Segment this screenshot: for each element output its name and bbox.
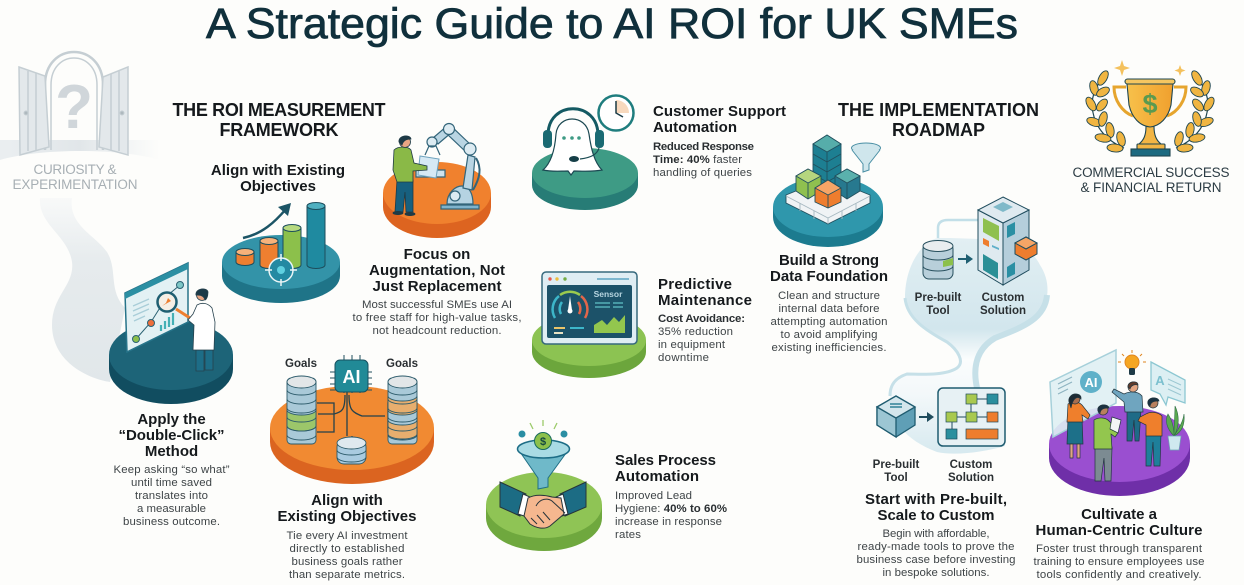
- description: training to ensure employees use: [1034, 556, 1204, 568]
- panel: build a strong data foundation: [770, 135, 888, 354]
- heading: [118, 411, 224, 460]
- icon: laurel wreath right: [1173, 69, 1216, 153]
- description: Foster trust through transparent: [1036, 543, 1203, 555]
- icon: chat bubble: A: [1155, 373, 1165, 388]
- icon: robot arm: [416, 124, 480, 209]
- description: [1034, 543, 1204, 581]
- description: until time saved: [131, 477, 212, 489]
- heading: [278, 492, 416, 525]
- icon: laurel wreath left: [1084, 69, 1127, 153]
- icon: AI screen: [1050, 350, 1116, 437]
- description: Cost Avoidance:: [658, 313, 745, 325]
- light blue roadmap path: [890, 220, 1048, 454]
- heading: [369, 246, 505, 295]
- icon: sensor dashboard: [542, 272, 637, 344]
- icon: handshake: [500, 482, 586, 528]
- goals stack: right: [388, 376, 417, 444]
- description: Clean and structure: [778, 290, 880, 302]
- icon: custom solution tower: [978, 197, 1037, 285]
- labels: Custom: [982, 292, 1024, 304]
- person: woman: [1067, 394, 1090, 458]
- icon: custom workflow panel: [938, 388, 1005, 446]
- description: not headcount reduction.: [372, 325, 502, 337]
- description: business goals rather: [292, 556, 403, 568]
- people: team: [1067, 382, 1162, 481]
- heading: Customer Support: [653, 103, 786, 120]
- icon: support chat bubble with headset: [543, 109, 604, 175]
- platform disc: [109, 320, 233, 404]
- title: A Strategic Guide to AI ROI for UK SMEs: [206, 0, 1018, 48]
- description: Begin with affordable,: [882, 528, 990, 540]
- heading: Data Foundation: [770, 268, 888, 285]
- labels: goals: Goals: [386, 358, 418, 370]
- icon: AI chip: [330, 355, 372, 393]
- labels: Pre-built: [873, 459, 919, 471]
- description: Hygiene: 40% to 60%: [615, 503, 727, 515]
- arrow: [919, 412, 934, 422]
- end point: commercial success and financial return: [1072, 60, 1230, 195]
- panel: sales process automation: [486, 420, 727, 551]
- label: curiosity and experimentation: CURIOSITY &: [34, 162, 116, 177]
- heading: Start with Pre-built,: [865, 491, 1007, 508]
- description: increase in response: [615, 516, 722, 528]
- description: downtime: [658, 352, 709, 364]
- icon: open door with question mark: ?: [55, 73, 93, 142]
- platform disc: [1049, 406, 1190, 496]
- panel: start with pre-built, scale to custom: [856, 197, 1037, 579]
- label: commercial success and financial return: [1072, 165, 1230, 195]
- floor under door: [0, 140, 160, 160]
- description: in equipment: [658, 339, 726, 351]
- description: [658, 313, 745, 364]
- icon: funnel: [852, 143, 880, 172]
- heading: [211, 162, 345, 195]
- icon: chat bubble: [1151, 362, 1185, 405]
- heading: Method: [145, 443, 198, 460]
- heading: Align with: [311, 492, 383, 509]
- description: attempting automation: [770, 316, 888, 328]
- labels: goals: Goals: [285, 358, 317, 370]
- grey winding path: [40, 198, 125, 382]
- description: handling of queries: [653, 167, 752, 179]
- heading: Sales Process: [615, 452, 716, 469]
- icon: target: [265, 254, 297, 286]
- description: Time: 40% faster: [653, 154, 742, 166]
- heading: Align with Existing: [211, 162, 345, 179]
- platform disc: [773, 177, 883, 247]
- icon: analyst in lab coat: [188, 289, 215, 371]
- description: in bespoke solutions.: [882, 567, 990, 579]
- description: to avoid amplifying: [780, 329, 878, 341]
- person: man in green: [1094, 405, 1121, 481]
- label: curiosity and experimentation: [12, 162, 138, 192]
- description: a measurable: [137, 503, 206, 515]
- description: [856, 528, 1016, 579]
- heading: Focus on: [404, 246, 470, 263]
- icon: clock: [598, 96, 634, 130]
- description: 35% reduction: [658, 326, 733, 338]
- panel: align with existing objectives (goals): [270, 355, 434, 581]
- heading: Objectives: [240, 178, 316, 195]
- description: to free staff for high-value tasks,: [352, 312, 522, 324]
- panel: focus on augmentation: [352, 124, 522, 337]
- heading: [1036, 506, 1202, 539]
- platform disc: [532, 314, 646, 378]
- heading: [770, 252, 888, 285]
- panel: cultivate a human-centric culture: [1034, 350, 1204, 581]
- label: curiosity and experimentation: EXPERIMENTATION: [12, 177, 138, 192]
- label: commercial success and financial return: COMMERCIAL SUCCESS: [1072, 165, 1230, 180]
- platform disc: [222, 235, 340, 303]
- labels: [873, 459, 994, 484]
- icon: data blocks: [786, 135, 870, 224]
- icon: funnel with coin: [518, 420, 570, 489]
- panel: customer support automation: [532, 96, 786, 210]
- person: presenter: [1112, 382, 1143, 441]
- description: existing inefficiencies.: [772, 342, 886, 354]
- icon: cube pre-built tool: [877, 396, 915, 437]
- description: business case before investing: [856, 554, 1016, 566]
- icon: AI chip: AI: [342, 367, 360, 387]
- small data stack: [337, 437, 366, 464]
- icon: stars: [1114, 60, 1186, 76]
- icon: worker: [393, 136, 427, 216]
- arrow: growth: [243, 209, 286, 238]
- heading: the implementation roadmap: ROADMAP: [892, 120, 985, 140]
- heading: Automation: [653, 119, 737, 136]
- description: than separate metrics.: [289, 569, 405, 581]
- panel: predictive maintenance: [532, 272, 752, 378]
- icon: open door with question mark: [19, 52, 128, 155]
- icon: sensor dashboard: Sensor: [594, 289, 623, 299]
- description: rates: [615, 529, 641, 541]
- description: [653, 141, 754, 179]
- description: Keep asking “so what”: [114, 464, 230, 476]
- icon: trophy: $: [1142, 89, 1158, 119]
- description: [352, 299, 522, 337]
- heading: Augmentation, Not: [369, 262, 505, 279]
- description: directly to established: [290, 543, 404, 555]
- heading: Predictive: [658, 276, 732, 293]
- description: Most successful SMEs use AI: [362, 299, 512, 311]
- person: man in orange: [1138, 398, 1162, 466]
- icon: analytics screen: [125, 263, 190, 352]
- icon: lightbulb: [1118, 350, 1146, 375]
- arrow: [958, 254, 973, 264]
- platform disc: [383, 162, 491, 238]
- platform disc: [532, 148, 638, 210]
- icon: funnel with coin: $: [540, 436, 546, 448]
- heading: Apply the: [137, 411, 206, 428]
- description: business outcome.: [123, 516, 220, 528]
- labels: Solution: [948, 472, 994, 484]
- description: [615, 490, 727, 541]
- heading: Scale to Custom: [878, 507, 994, 524]
- heading: Build a Strong: [779, 252, 879, 269]
- heading: [615, 452, 716, 485]
- heading: “Double-Click”: [118, 427, 224, 444]
- description: Tie every AI investment: [286, 530, 408, 542]
- heading: Just Replacement: [372, 278, 502, 295]
- description: tools confidently and creatively.: [1036, 569, 1202, 581]
- heading: [865, 491, 1007, 524]
- platform disc: [270, 386, 434, 484]
- description: Reduced Response: [653, 141, 754, 153]
- icon: AI screen: AI: [1084, 375, 1098, 390]
- panel: align with existing objectives (chart): [211, 162, 345, 303]
- heading: Cultivate a: [1081, 506, 1158, 523]
- heading: the ROI measurement framework: [172, 100, 386, 140]
- heading: the ROI measurement framework: THE ROI MEASUREMENT: [172, 100, 386, 120]
- start point: curiosity and experimentation: [0, 52, 160, 192]
- labels: Solution: [980, 305, 1026, 317]
- heading: [658, 276, 752, 309]
- description: Improved Lead: [615, 490, 692, 502]
- icon: database pre-built tool: [923, 240, 953, 279]
- heading: Human-Centric Culture: [1036, 522, 1202, 539]
- heading: Existing Objectives: [278, 508, 416, 525]
- description: internal data before: [778, 303, 880, 315]
- label: commercial success and financial return: & FINANCIAL RETURN: [1080, 180, 1222, 195]
- labels: Custom: [950, 459, 992, 471]
- description: [114, 464, 230, 528]
- chart: rising cylinders: [236, 202, 325, 268]
- description: translates into: [135, 490, 208, 502]
- icon: trophy: [1114, 79, 1186, 156]
- heading: the implementation roadmap: [838, 100, 1039, 140]
- description: ready-made tools to prove the: [858, 541, 1014, 553]
- connector lines: [317, 385, 405, 440]
- heading: [653, 103, 786, 136]
- heading: the ROI measurement framework: FRAMEWORK: [220, 120, 338, 140]
- labels: Tool: [926, 305, 950, 317]
- icon: document: [418, 156, 439, 178]
- labels: Tool: [884, 472, 908, 484]
- heading: Maintenance: [658, 292, 752, 309]
- labels: goals: [285, 358, 418, 370]
- platform disc: [486, 472, 602, 551]
- heading: the implementation roadmap: THE IMPLEMENTATION: [838, 100, 1039, 120]
- heading: Automation: [615, 468, 699, 485]
- panel: apply the double-click method: [109, 263, 233, 528]
- labels: [915, 292, 1026, 317]
- description: [770, 290, 888, 354]
- description: [286, 530, 408, 581]
- labels: Pre-built: [915, 292, 961, 304]
- goals stack: left: [287, 376, 316, 444]
- icon: potted plant: [1166, 406, 1184, 450]
